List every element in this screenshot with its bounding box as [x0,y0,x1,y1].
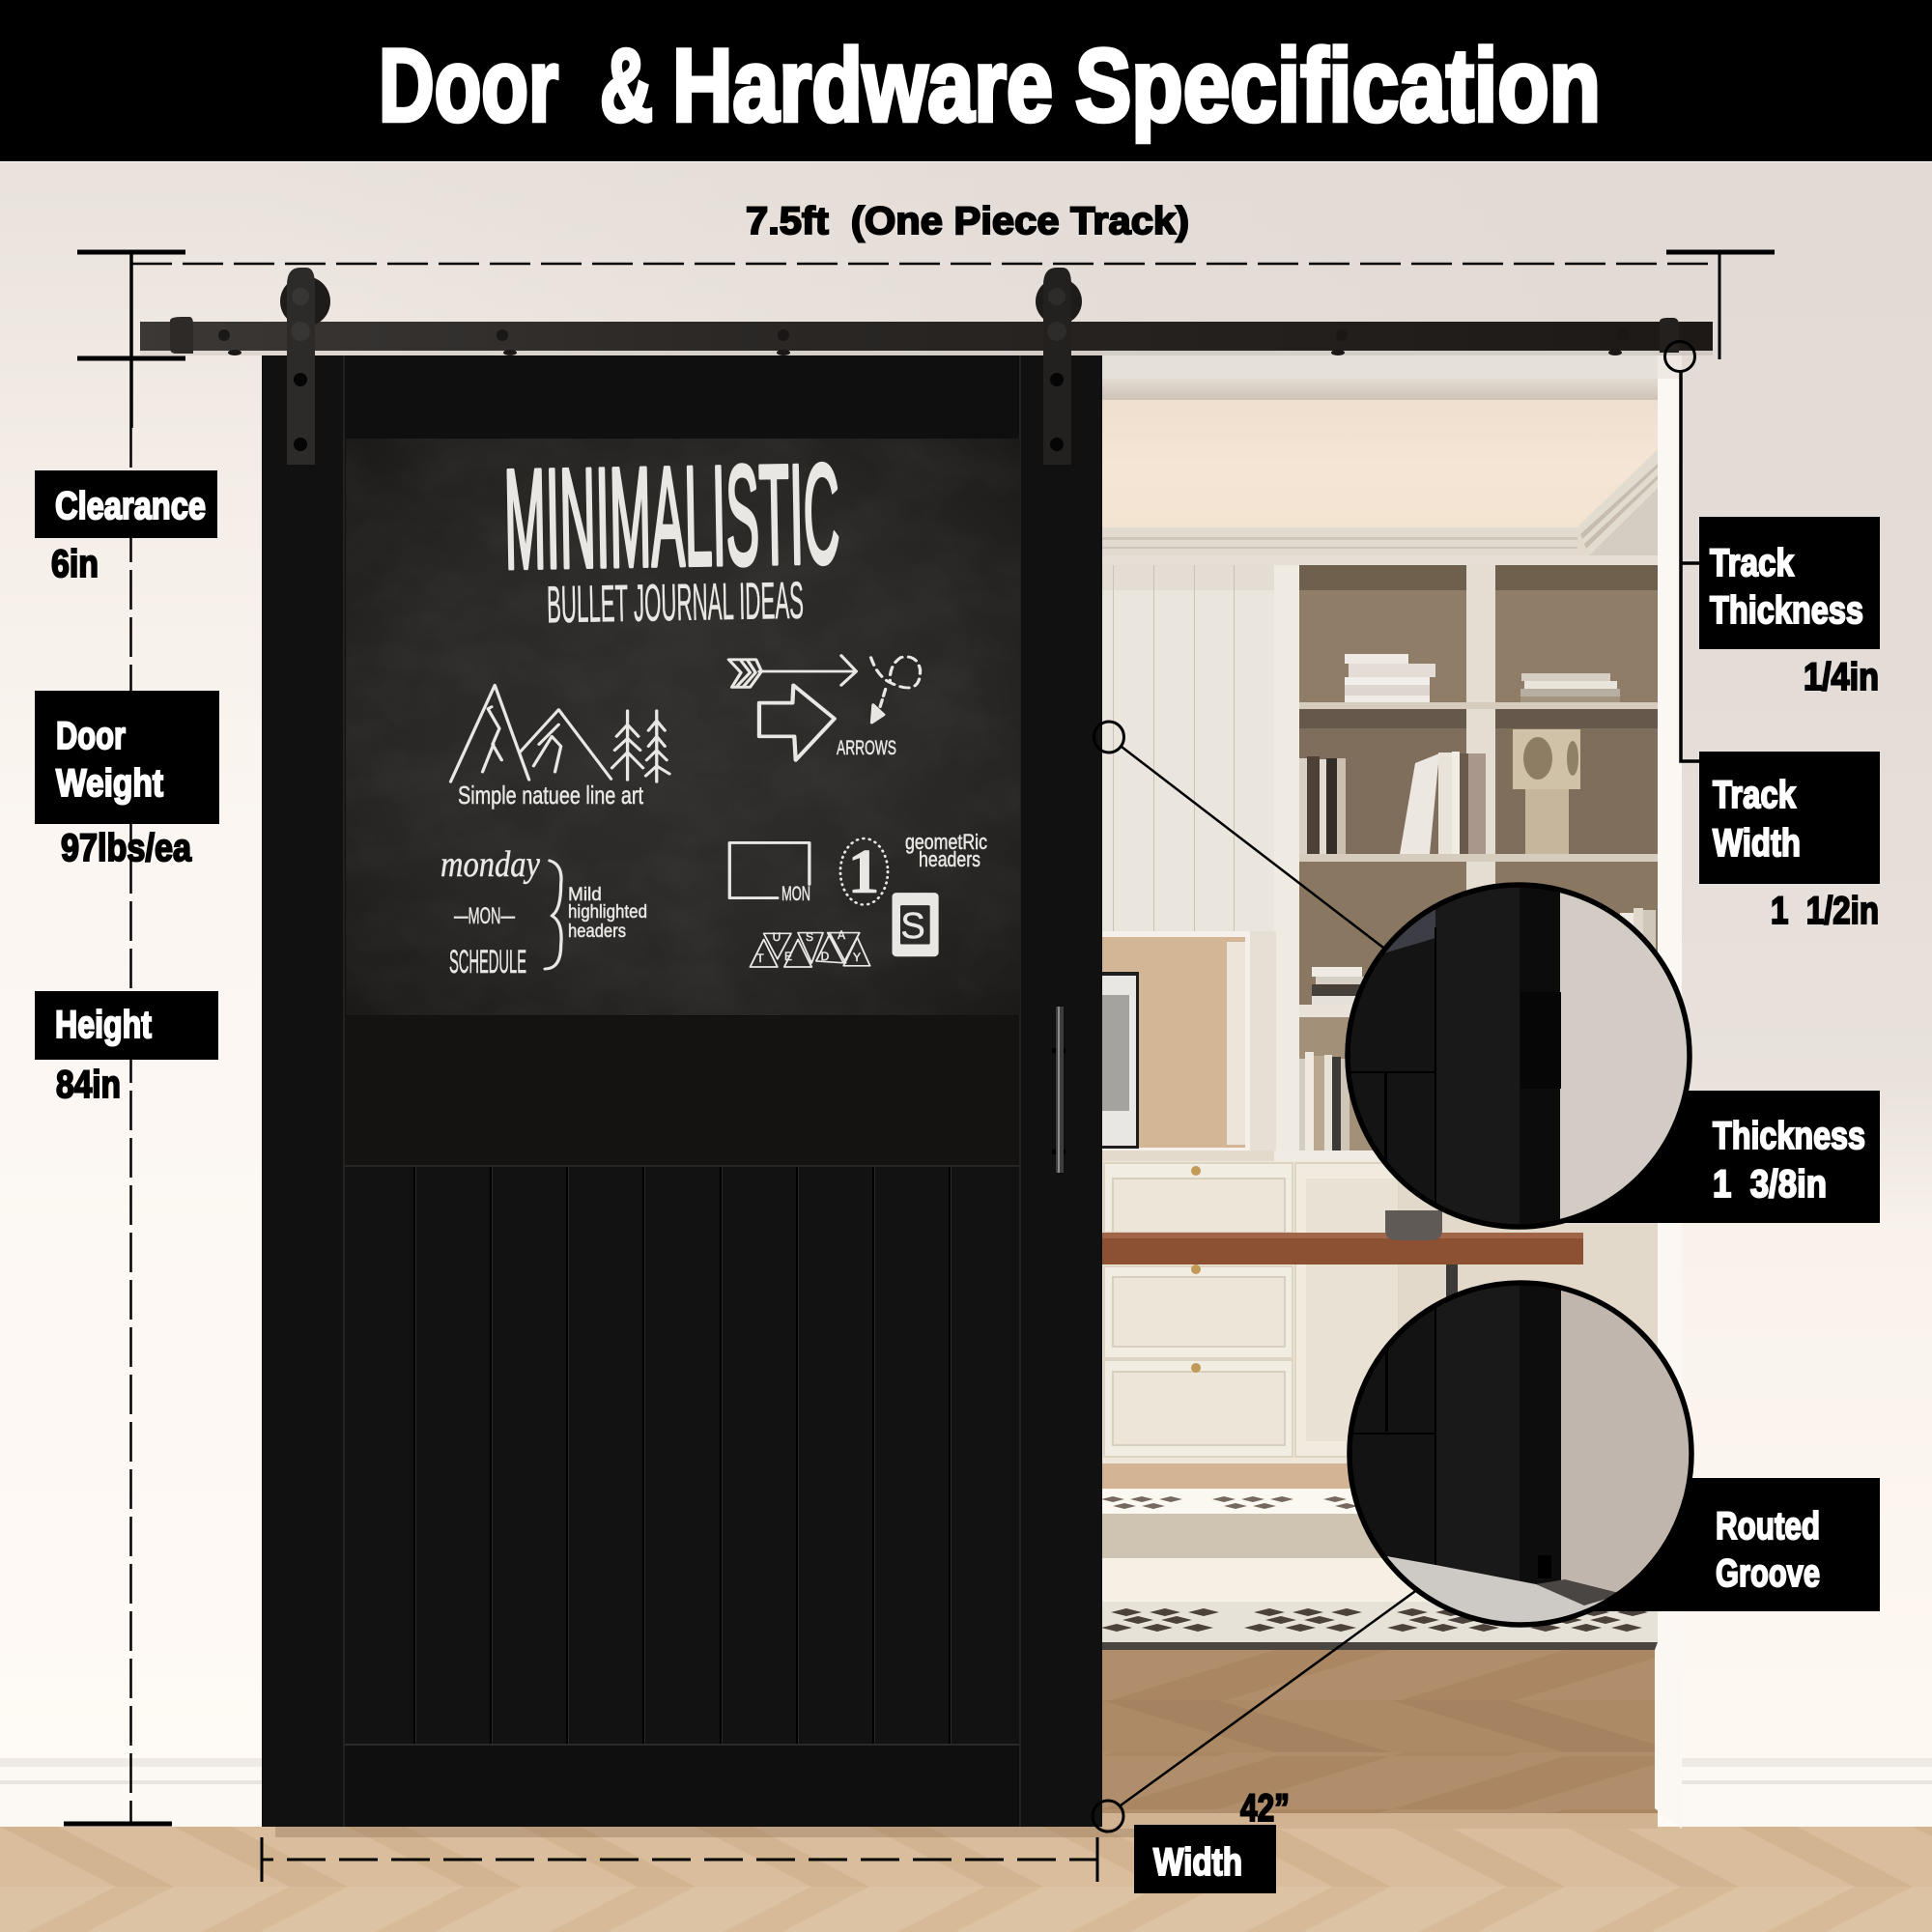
label text: routed groove: Groove [1716,1552,1820,1595]
chalk banner letters: D [821,950,830,963]
chalk label: simple nature line art: Simple natuee line art [458,781,644,810]
ceiling [1102,400,1658,527]
beadboard wall [1102,555,1658,933]
door stiles [262,355,1102,1827]
value: width: 42” [1240,1787,1290,1830]
pine trees sketch [612,711,669,781]
door bottom rail [345,1744,1019,1827]
sculpture [1513,729,1580,854]
door casing [1655,379,1682,1829]
mountains sketch [450,685,611,781]
chalk note: geometric headers [905,830,987,871]
barn door [262,355,1102,1827]
chalk note: mild highlighted headers: highlighted [568,902,647,923]
end stop left [170,317,193,354]
left hanger [280,268,330,465]
chalk banner letters: A [838,928,845,942]
barn door track [140,317,1713,355]
floor in foreground [0,1827,1932,1932]
title banner: & [600,27,653,143]
label: width: Width [1153,1841,1242,1884]
label box: routed groove [1546,1478,1880,1611]
leader line: door bottom to routed groove detail [1093,1589,1418,1832]
chalk banner letters [756,928,861,965]
triangle banner sketch [751,933,870,967]
detail circle: routed groove [1343,1275,1701,1633]
callout marker: track end [1665,342,1699,761]
right room wall [1590,489,1658,555]
width dimension line [262,1837,1097,1882]
label: track width: Width [1713,822,1801,865]
label: height: Height [55,1004,152,1046]
chalk banner letters: Y [853,951,861,964]
chalk note: mild highlighted headers: Mild [568,885,602,905]
title banner: Hardware [672,27,1053,143]
baseboards [0,1758,1932,1827]
label: track thickness: Thickness [1710,589,1863,632]
book stacks [1299,654,1620,854]
chalk numeral one: 1 [848,837,879,907]
value: track thickness: 1/4in [1804,656,1879,698]
label: track thickness [1699,517,1880,649]
chalk banner letters: E [784,950,792,963]
feather arrow sketch [728,656,856,687]
chalkboard: SCHEDULE [449,944,526,980]
detail circle: door thickness [1343,879,1695,1232]
label text: thickness: 1 3/8in [1713,1163,1827,1206]
chalkboard [346,435,1020,1015]
value: height: 84in [56,1064,121,1106]
block arrow sketch [759,685,835,760]
chalk banner letters: T [756,952,764,965]
chalk letter S: S [900,906,925,947]
label: height [35,991,218,1060]
dashed loop arrow sketch [871,657,921,723]
door handle [1052,1007,1065,1173]
room floor and rug [1102,1463,1658,1829]
framed art [1102,931,1276,1151]
chalk text: mon: —MON— [454,903,515,929]
lower shelf books [1299,908,1656,1151]
label box: thickness [1564,1091,1880,1223]
door top rail [345,355,1019,438]
chalk note: geometric headers: headers [919,847,980,871]
chalkboard: MINIMALISTIC [503,435,840,598]
room seen through doorway [1102,351,1658,1829]
vertical height dimension line [64,252,172,1824]
label: door weight: Door [56,715,126,757]
value: track width: 1 1/2in [1771,890,1879,932]
soffit [1102,351,1658,400]
chalk label: arrows: ARROWS [837,737,896,759]
brace sketch [545,861,561,969]
label: clearance [35,470,217,538]
title banner: Door [379,27,558,143]
door middle rail [345,1016,1019,1166]
title banner: Specification [1075,27,1601,143]
chalk note: mild highlighted headers [568,885,647,942]
label: clearance: Clearance [55,485,206,527]
label: door weight [35,691,219,824]
numbered circle sketch [840,838,888,905]
chalk note: mild highlighted headers: headers [568,922,626,942]
chalk banner letters: S [806,930,813,944]
crown molding [1102,464,1658,549]
value: clearance: 6in [51,543,99,585]
label: track width [1699,752,1880,884]
chalk note: geometric headers: geometRic [905,830,987,854]
chalk drawings [450,656,937,969]
rectangle header sketch [729,842,810,898]
end stop right [1660,318,1679,353]
S badge sketch [894,895,937,955]
chalk script: monday: monday [440,844,540,885]
label: track width: Track [1713,774,1797,816]
label text: thickness [1713,1115,1865,1206]
track dimension lines [77,252,1775,359]
label text: thickness: Thickness [1713,1115,1865,1157]
chalkboard: BULLET JOURNAL IDEAS [546,572,804,634]
cabinets [1102,1161,1398,1463]
room back wall base [1102,527,1589,1161]
label text: routed groove: Routed [1716,1505,1820,1548]
label: width [1134,1825,1276,1893]
table [1102,1210,1583,1297]
title banner [0,0,1932,161]
chalk text: box mon: MON [781,883,810,905]
bookcase [1274,565,1658,1164]
label text: routed groove [1716,1505,1820,1595]
leader line: door edge to thickness detail [1094,722,1383,948]
label: door weight: Weight [56,762,163,805]
label: track thickness: Track [1710,542,1795,584]
track length dimension label: 7.5ft (One Piece Track) [746,200,1189,242]
right hanger [1036,268,1082,465]
value: door weight: 97lbs/ea [61,827,192,869]
door plank panel [345,1165,1019,1745]
track bolts [218,329,1629,355]
chalk banner letters: U [773,930,781,944]
